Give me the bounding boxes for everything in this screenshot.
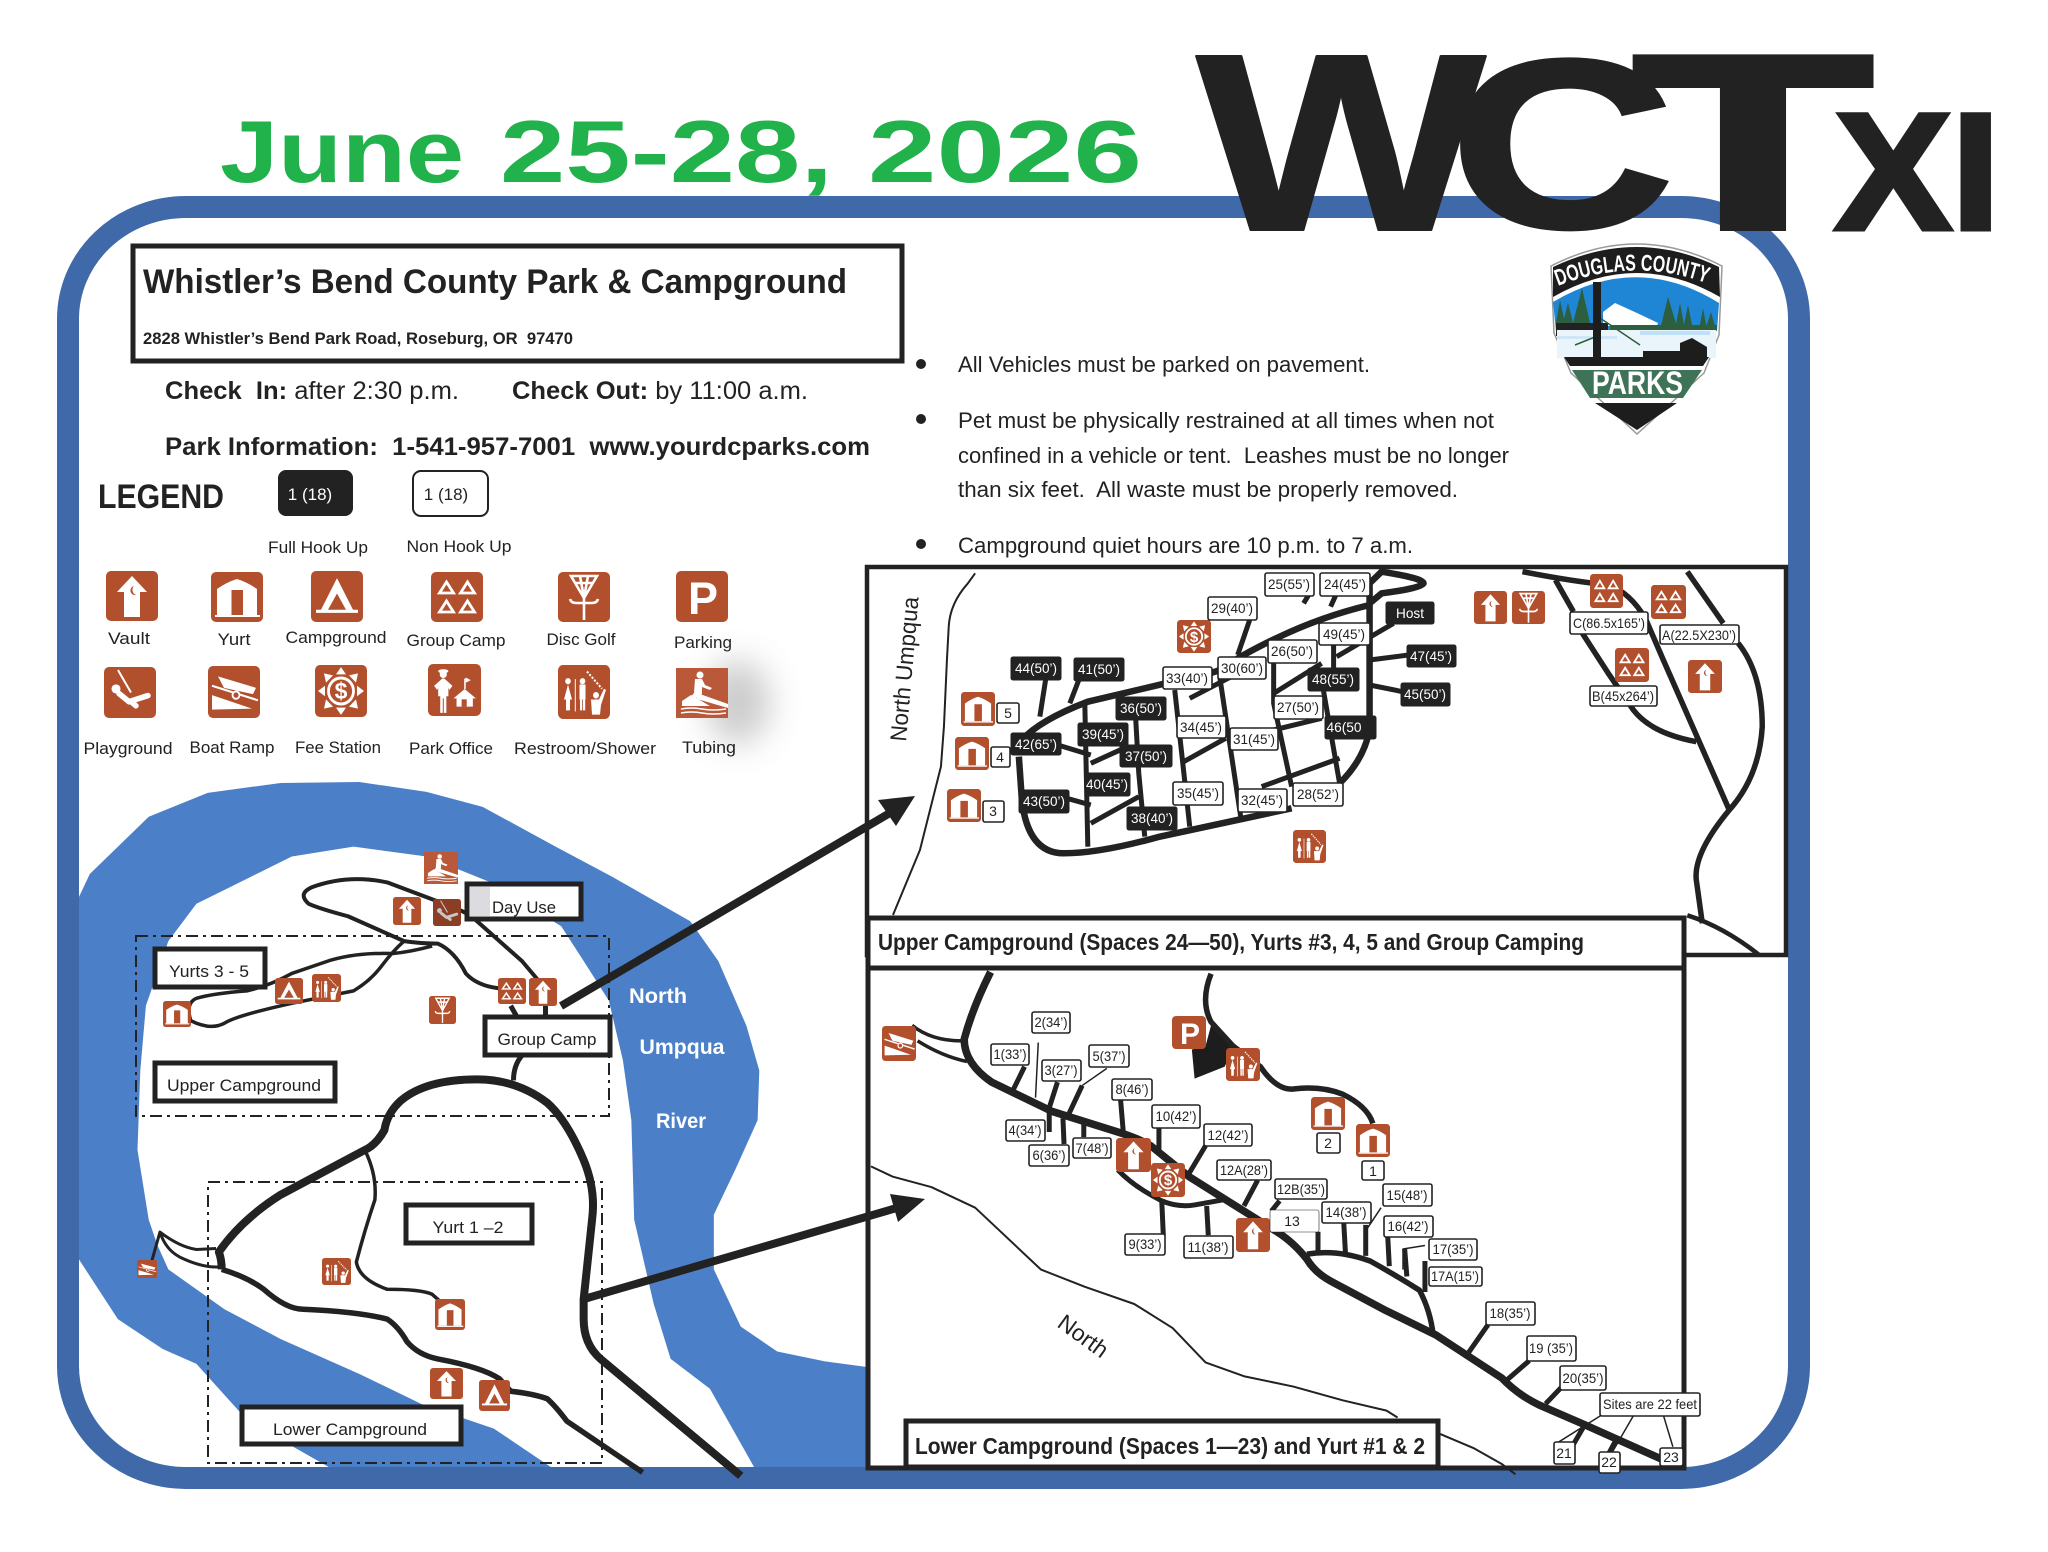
site 31: 31(45’) [1233,731,1275,747]
legend icon: campground [286,571,386,647]
site 42 [1011,733,1061,755]
restroom icon [1293,830,1326,863]
site 21 [1554,1442,1575,1464]
map icon: vault [430,1368,463,1399]
site 39: 39(45’) [1082,726,1124,742]
park rules list: All Vehicles must be parked on pavement. [958,352,1370,377]
map icon: campground [479,1380,510,1411]
upper panel river line [893,573,975,915]
site 45 [1401,683,1450,706]
vault icon [1688,660,1722,693]
site 38: 38(40’) [1131,810,1173,826]
site 19: 19 (35’) [1529,1340,1573,1356]
site 26: 26(50’) [1271,643,1313,659]
legend icon: fee station: $ [335,678,348,704]
legend icon: yurt: Yurt [218,630,251,649]
arrow: overview to lower campground [584,1194,925,1299]
site 46 [1325,716,1376,739]
map label: Group Camp [485,1017,610,1055]
note: sites are 22 feet: Sites are 22 feet [1603,1396,1697,1412]
map label: Yurts 3-5: Yurts 3 - 5 [169,962,249,981]
map icon: yurt [163,1001,191,1027]
site 41: 41(50’) [1078,661,1120,677]
site 40: 40(45’) [1086,776,1128,792]
parking icon [1172,1016,1206,1051]
site 4 [1006,1120,1045,1141]
site 32: 32(45’) [1241,792,1283,808]
lower panel river label: North [1053,1309,1114,1363]
badge top text: DOUGLAS COUNTY [1554,254,1712,286]
group site A: A(22.5X230’) [1662,627,1736,643]
yurt 3 icon [947,789,981,822]
river label: North [629,985,687,1008]
legend: non hook up swatch [406,471,512,556]
site 2: 2(34’) [1034,1014,1068,1030]
site 40 [1085,773,1130,796]
WCT XI logo wordmark [1196,1,2000,284]
group camp icon [1651,585,1686,619]
site 35: 35(45’) [1177,785,1219,801]
upper panel icons [947,574,1722,863]
group camp icon [1615,648,1649,682]
site 25 [1265,573,1314,596]
vault icon [1236,1218,1270,1252]
site 24 [1320,573,1370,596]
fee station icon [1177,620,1211,653]
legend icon: park office [409,664,493,758]
site 3: 3(27’) [1044,1062,1078,1078]
site 7: 7(48’) [1076,1140,1108,1156]
site 3 [1042,1060,1081,1081]
site 9 [1125,1234,1165,1255]
lower panel river line [871,1166,1515,1474]
site 29 [1208,597,1257,620]
site 12 [1204,1124,1252,1146]
map label: Upper Campground [155,1063,335,1101]
site 12B: 12B(35’) [1277,1181,1325,1197]
lower panel site labels [991,1012,1700,1473]
site 14: 14(38’) [1326,1204,1366,1220]
legend icon: vault [106,571,158,648]
map icon: disc golf [429,996,456,1024]
blue rounded frame [68,207,1799,1478]
site 10 [1152,1105,1200,1128]
site 9: 9(33’) [1128,1236,1162,1252]
site 18: 18(35’) [1490,1305,1530,1321]
map icon: vault [529,978,557,1006]
site 8 [1112,1079,1152,1100]
site 34: 34(45’) [1180,719,1222,735]
map label: Yurt 1-2: Yurt 1 –2 [432,1218,504,1237]
legend icon: tubing with shadow: Tubing [682,738,736,757]
park name: Whistler’s Bend County Park & Campground [143,263,847,301]
site 19 [1527,1336,1576,1361]
site 49 [1319,623,1370,645]
site 47 [1407,645,1456,667]
site 45: 45(50’) [1404,686,1446,702]
fee station icon: $ [1164,1172,1173,1189]
legend icon: fee station [295,665,381,757]
group site C [1570,612,1648,634]
yurt 4 icon [955,737,989,770]
parking icon: P [1180,1018,1200,1051]
event date title: 25-28, [500,102,833,201]
Douglas County Parks badge [1550,243,1723,435]
header box: park name and address [133,246,902,361]
park rules list: confined in a vehicle or tent. Leashes must be no longer [958,443,1509,468]
site 11 [1184,1236,1233,1258]
map icon: restroom [322,1258,351,1285]
site 22: 22 [1601,1454,1617,1470]
site 17: 17(35’) [1432,1241,1474,1257]
legend icon: parking: Parking [674,633,732,652]
site 16 [1384,1216,1433,1237]
site 38 [1127,807,1177,830]
river label: River [656,1110,706,1133]
river: North Umpqua on overview map [76,782,870,1468]
legend: full hook up swatch: Full Hook Up [268,538,368,557]
WCT XI logo wordmark: W [1196,1,1486,284]
site 49: 49(45’) [1323,626,1365,642]
site 23: 23 [1663,1449,1679,1465]
WCT XI logo wordmark: C [1450,10,1674,278]
map icon: yurt [435,1299,465,1330]
map label: Lower Campground [242,1407,461,1444]
site 34 [1177,716,1226,738]
lower panel title box: Lower Campground (Spaces 1—23) and Yurt #1 & 2 [915,1433,1425,1459]
site 20: 20(35’) [1562,1370,1604,1386]
boat ramp icon [882,1026,916,1061]
site 35 [1173,782,1223,805]
yurt number 3: 3 [989,803,997,819]
site 41 [1074,658,1124,681]
group camp icon [1590,574,1623,608]
event date title: 2026 [868,102,1142,201]
group site B: B(45x264’) [1592,688,1654,704]
site 12A: 12A(28’) [1220,1162,1268,1178]
park rules list: Campground quiet hours are 10 p.m. to 7 a.m. [958,533,1413,558]
site 17A: 17A(15’) [1431,1268,1479,1284]
yurt 5 icon [961,692,995,726]
site 29: 29(40’) [1211,600,1253,616]
yurt number 1: 1 [1369,1163,1377,1179]
upper campground dashed zone [136,936,609,1116]
WCT XI logo wordmark: T [1633,3,1873,281]
upper panel site labels [983,573,1739,830]
map label: Group Camp: Group Camp [498,1030,596,1049]
site 1: 1(33’) [994,1046,1026,1062]
legend: full hook up swatch [268,470,368,557]
legend heading: LEGEND [98,478,224,516]
site 5: 5(37’) [1092,1048,1126,1064]
lower panel title box [906,1421,1438,1467]
yurt number 4 [991,747,1010,767]
site 10: 10(42’) [1156,1108,1196,1124]
host site [1386,602,1434,624]
site 26 [1268,640,1317,663]
check in time: Check In: after 2:30 p.m. [165,377,459,405]
legend icon: playground [84,667,172,758]
site 22 [1599,1452,1620,1473]
legend icon: vault: Vault [108,629,150,648]
yurt 2 icon [1311,1097,1345,1130]
site 46: 46(50 [1326,719,1362,735]
panel: upper campground [867,567,1786,955]
site 36: 36(50’) [1120,700,1162,716]
event date title [220,102,1142,201]
map label: Upper Campground: Upper Campground [167,1076,321,1095]
upper panel roads [1019,572,1762,923]
group site C: C(86.5x165’) [1573,615,1645,631]
address: 2828 Whistler’s Bend Park Road, Roseburg, OR 97470 [143,329,573,348]
lower panel parking lot [1192,1025,1233,1079]
site 21: 21 [1556,1445,1572,1461]
site 27 [1274,696,1323,719]
legend icon: group camp [406,572,506,650]
site 15 [1383,1184,1432,1206]
legend icon: parking [674,571,732,652]
legend: non hook up swatch: 1 (18) [424,485,468,504]
yurt number 1 [1362,1161,1384,1180]
map icon: campground [275,978,303,1004]
host site: Host [1396,605,1424,621]
map icon: playground (darkened) [433,899,461,926]
yurt number 4: 4 [996,749,1004,765]
site 30: 30(60’) [1221,660,1263,676]
legend icon: disc golf [546,572,616,649]
overview map icons [137,852,557,1411]
site 6: 6(36’) [1032,1147,1066,1163]
site 48: 48(55’) [1312,671,1354,687]
site 37: 37(50’) [1125,748,1167,764]
overview map roads [152,879,741,1476]
site 43: 43(50’) [1023,793,1065,809]
site 25: 25(55’) [1268,576,1310,592]
site 17 [1429,1239,1477,1260]
site 6 [1029,1145,1069,1166]
map label: Day Use [467,884,581,919]
fee station icon [1151,1163,1185,1197]
map label: Day Use: Day Use [492,898,556,917]
site 32 [1238,789,1287,812]
legend icon: tubing with shadow [676,660,770,757]
map label: Yurts 3-5 [155,949,265,987]
park rules list: than six feet. All waste must be properly removed. [958,477,1458,502]
lower panel icons [882,1016,1390,1252]
upper panel title strip: Upper Campground (Spaces 24—50), Yurts #3, 4, 5 and Group Camping [878,929,1584,955]
legend: non hook up swatch: Non Hook Up [406,537,512,556]
disc golf icon [1512,591,1545,624]
site 12: 12(42’) [1208,1127,1248,1143]
legend icon: park office: Park Office [409,739,493,758]
site 30 [1218,657,1266,679]
WCT XI logo wordmark: XI [1835,80,2000,265]
site 23 [1660,1448,1683,1466]
site 27: 27(50’) [1277,699,1319,715]
legend icon: playground: Playground [84,739,172,758]
site 15: 15(48’) [1386,1187,1428,1203]
legend icon: disc golf: Disc Golf [546,630,616,649]
site 39 [1078,723,1128,746]
site 37 [1120,745,1172,767]
site 20 [1560,1366,1606,1390]
site 47: 47(45’) [1410,648,1452,664]
upper panel title strip [868,918,1684,968]
site 48 [1308,668,1359,691]
site 33 [1163,667,1212,689]
legend icon: parking: P [688,573,718,624]
map icon: vault [393,897,421,925]
site 4: 4(34’) [1008,1122,1042,1138]
map icon: restroom [312,974,341,1002]
site 44 [1011,657,1061,680]
legend icon: restroom and shower [514,665,656,758]
site 11: 11(38’) [1188,1239,1228,1255]
yurt number 2 [1317,1133,1340,1153]
map icon: group camp [498,978,526,1004]
site 24: 24(45’) [1324,576,1366,592]
park rules list [916,352,1509,558]
upper panel corner road arc [1687,915,1759,955]
map label: Lower Campground: Lower Campground [273,1420,427,1439]
yurt number 5: 5 [1004,705,1012,721]
legend icon: fee station: Fee Station [295,738,381,757]
vault icon [1116,1138,1151,1172]
lower panel roads [912,972,1673,1459]
site 28 [1293,783,1343,806]
legend icon: boat ramp: Boat Ramp [190,738,274,757]
panel: lower campground [868,968,1684,1474]
legend icon: yurt [211,572,263,649]
badge parks text: PARKS [1592,365,1683,401]
restroom icon [1226,1048,1260,1081]
site 13 [1270,1210,1319,1232]
river label [629,985,725,1133]
arrow: overview to upper campground [561,796,915,1006]
lower campground dashed zone [208,1182,602,1463]
park rules list: Pet must be physically restrained at all times when not [958,408,1494,433]
site 44: 44(50’) [1015,660,1057,676]
yurt number 5 [997,703,1019,723]
fee station icon: $ [1190,629,1199,646]
yurt number 2: 2 [1324,1135,1332,1151]
map label: Yurt 1-2 [406,1205,532,1243]
site 8: 8(46’) [1116,1081,1148,1097]
park information line: Park Information: 1-541-957-7001 www.yourdcparks.com [165,433,870,461]
vault icon [1474,591,1507,624]
legend icon: group camp: Group Camp [406,631,506,650]
site 28: 28(52’) [1297,786,1339,802]
site 33: 33(40’) [1166,670,1208,686]
site 18 [1486,1302,1535,1325]
legend icon: campground: Campground [286,628,386,647]
legend icon: boat ramp [190,666,274,757]
site 14 [1322,1202,1371,1223]
map icon: boat ramp [137,1260,157,1278]
site 16: 16(42’) [1388,1218,1428,1234]
legend icon: restroom and shower: Restroom/Shower [514,739,656,758]
site 36 [1116,697,1166,720]
note: sites are 22 feet [1600,1393,1700,1416]
yurt number 3 [983,801,1004,822]
event date title: June [220,102,464,201]
map icon: tubing [424,852,458,884]
upper panel river label: North Umpqua [885,596,924,742]
river label: Umpqua [640,1036,725,1059]
site 13: 13 [1284,1213,1300,1229]
site 42: 42(65’) [1015,736,1057,752]
check out time: Check Out: by 11:00 a.m. [512,377,808,405]
yurt 1 icon [1356,1124,1390,1157]
site 31 [1230,728,1278,750]
site 5 [1089,1045,1129,1067]
site 43 [1019,790,1069,813]
legend: full hook up swatch: 1 (18) [288,485,332,504]
